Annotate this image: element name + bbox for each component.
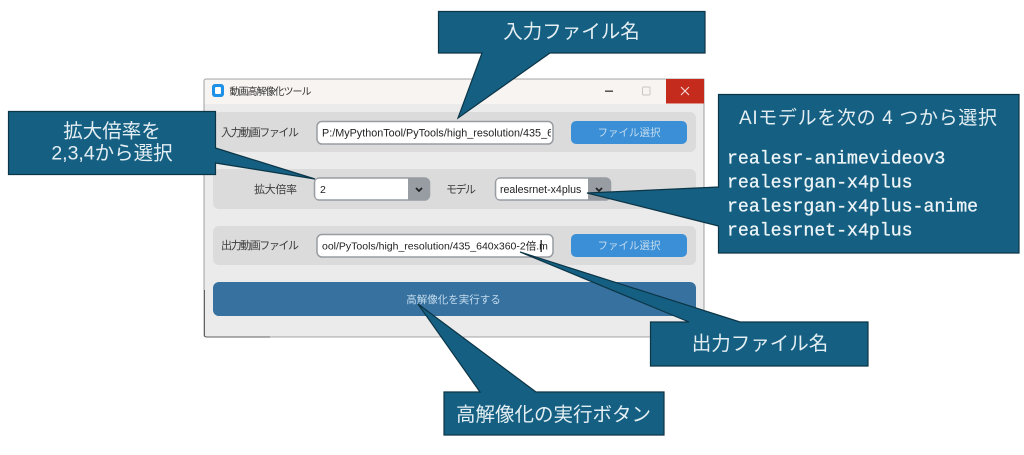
output path field: ool/PyTools/high_resolution/435_640x360-2倍.mp4 — [322, 240, 560, 252]
file select button — [571, 121, 687, 144]
callout: run button — [418, 304, 664, 435]
callout: scale selection: 2,3,4から選択 — [51, 142, 173, 164]
callout: scale selection: 拡大倍率を — [63, 120, 161, 142]
callout: run button: 高解像化の実行ボタン — [456, 404, 651, 426]
callout: output file name — [520, 252, 868, 366]
callout: output file name: 出力ファイル名 — [692, 333, 828, 355]
icon: maximize — [642, 87, 650, 95]
window title: 動画高解像化ツール — [230, 85, 312, 98]
panel: output file row — [213, 226, 696, 265]
model names: realesr-animevideov3 — [727, 150, 945, 170]
scale dropdown: 2 — [320, 184, 326, 196]
input path field — [316, 120, 554, 145]
file select button: ファイル選択 — [598, 126, 661, 139]
application window — [204, 79, 704, 337]
model names: realesrgan-x4plus-anime — [727, 198, 978, 218]
scale label: 拡大倍率 — [254, 182, 297, 196]
model names: realesrnet-x4plus — [727, 222, 913, 242]
callout: AI model list — [587, 94, 1019, 253]
model names — [727, 150, 978, 242]
model names: realesrgan-x4plus — [727, 174, 913, 194]
window lower-left edge — [204, 290, 270, 337]
output label: 出力動画ファイル — [221, 238, 299, 252]
output path field — [317, 234, 560, 257]
window frame — [204, 79, 704, 337]
icon: app — [212, 84, 224, 97]
panel: scale and model row — [213, 169, 696, 209]
input path field: P:/MyPythonTool/PyTools/high_resolution/435_640x360.mp4 — [322, 128, 612, 140]
callout: input file name: 入力ファイル名 — [503, 21, 640, 43]
model dropdown — [496, 178, 610, 200]
icon: minimize — [605, 90, 613, 92]
callout: input file name — [438, 12, 705, 118]
input label: 入力動画ファイル — [221, 125, 299, 139]
file select button: ファイル選択 — [598, 239, 661, 252]
callout: scale selection — [8, 112, 315, 179]
icon: close button — [666, 79, 704, 104]
model dropdown: realesrnet-x4plus — [500, 184, 581, 196]
title bar — [204, 79, 704, 104]
execute button: 高解像化を実行する — [406, 293, 501, 306]
panel: input file row — [213, 112, 696, 152]
execute button — [213, 282, 696, 316]
model label: モデル — [446, 182, 476, 196]
scale dropdown — [314, 178, 430, 200]
file select button — [571, 234, 687, 257]
model heading: AIモデルを次の 4 つから選択 — [739, 107, 997, 129]
